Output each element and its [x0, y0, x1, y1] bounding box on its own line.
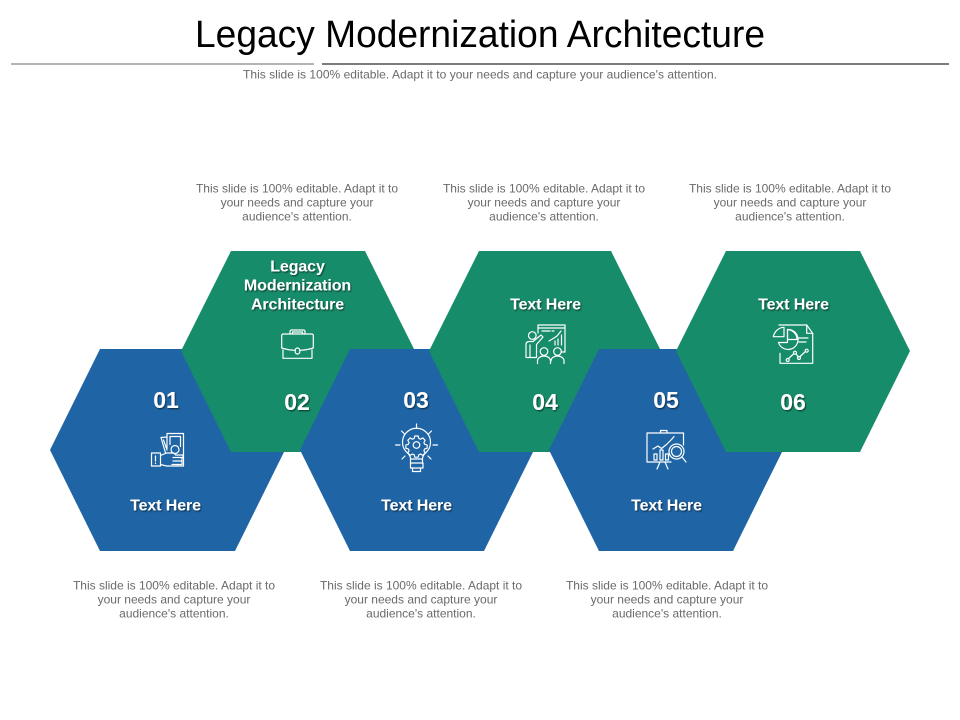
description 03: audience's attention. [366, 606, 476, 620]
icon: light bulb with gear [396, 424, 438, 472]
description 04: audience's attention. [489, 210, 599, 224]
hexagon 04 [429, 251, 661, 452]
label 06: Text Here [758, 296, 829, 314]
description 04 [443, 182, 645, 224]
description 05: audience's attention. [612, 606, 722, 620]
label 02 [244, 258, 351, 314]
description 02: your needs and capture your [221, 196, 373, 210]
label 02: Legacy [270, 258, 325, 276]
description 02 [196, 182, 398, 224]
description 02: audience's attention. [242, 210, 352, 224]
hexagon 03 [300, 349, 534, 551]
description 04: This slide is 100% editable. Adapt it to [443, 182, 645, 196]
label 05: Text Here [631, 498, 702, 514]
description 01: audience's attention. [119, 606, 229, 620]
description 01 [73, 578, 275, 620]
description 06: audience's attention. [735, 210, 845, 224]
number 06: 06 [780, 389, 806, 415]
number 03: 03 [403, 387, 429, 413]
label 02: Modernization [244, 278, 351, 294]
title: Legacy Modernization Architecture [195, 14, 765, 56]
description 06: your needs and capture your [714, 196, 866, 210]
icon: briefcase [282, 330, 313, 358]
icon: money in hand [152, 434, 184, 466]
description 05: This slide is 100% editable. Adapt it to [566, 578, 768, 592]
description 02: This slide is 100% editable. Adapt it to [196, 182, 398, 196]
subtitle: This slide is 100% editable. Adapt it to your needs and capture your audience's attention. [243, 68, 717, 82]
number 05: 05 [653, 387, 679, 413]
description 03 [320, 578, 522, 620]
icon: report with charts [773, 325, 813, 363]
label 02: Architecture [251, 296, 344, 314]
description 06 [689, 182, 891, 224]
description 01: your needs and capture your [98, 592, 250, 606]
label 01: Text Here [130, 498, 201, 514]
hexagon 01 [50, 349, 285, 551]
number 04: 04 [532, 389, 558, 415]
hexagon 05 [549, 349, 783, 551]
description 03: This slide is 100% editable. Adapt it to [320, 578, 522, 592]
number 01: 01 [153, 387, 179, 413]
description 03: your needs and capture your [345, 592, 497, 606]
hexagon 06 [676, 251, 910, 452]
icon: presentation board with magnifier [647, 430, 686, 469]
number 02: 02 [284, 389, 310, 415]
description 05 [566, 578, 768, 620]
icon: presenter with audience [526, 325, 565, 364]
description 06: This slide is 100% editable. Adapt it to [689, 182, 891, 196]
description 05: your needs and capture your [591, 592, 743, 606]
hexagon 02 [181, 251, 415, 452]
description 01: This slide is 100% editable. Adapt it to [73, 578, 275, 592]
label 03: Text Here [381, 498, 452, 514]
description 04: your needs and capture your [468, 196, 620, 210]
label 04: Text Here [510, 296, 581, 314]
